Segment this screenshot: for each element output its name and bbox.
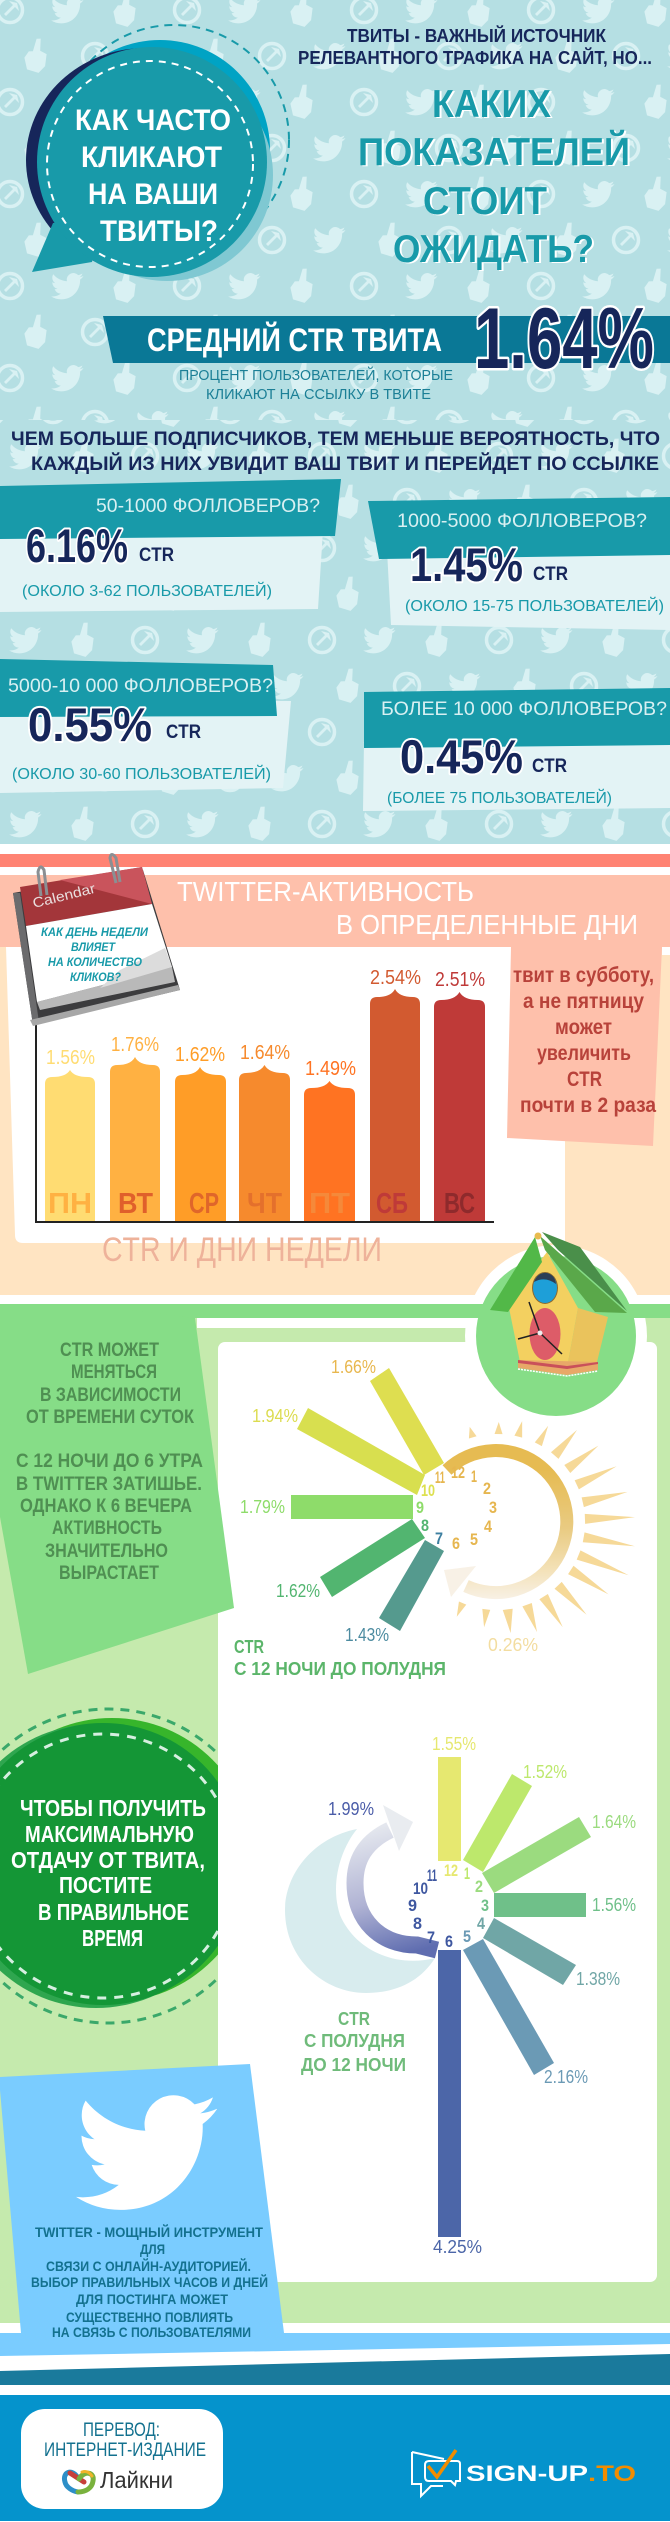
heading: twitter activity on certain days [177,876,638,940]
bar: Sunday: 2.51% [435,969,485,991]
panel: 5000-10000 followers [0,659,291,793]
labels: values: 1.55% [432,1734,476,1754]
labels: clock numerals: 7 [435,1529,443,1548]
icon: calendar: ВЛИЯЕТ [71,940,116,954]
bar: Thursday: 1.64% [240,1042,290,1064]
bar: Thursday [239,1042,290,1221]
icon: calendar: КЛИКОВ? [70,970,122,984]
panel: over 10000 followers: 0.45% [400,730,523,783]
intro text: РЕЛЕВАНТНОГО ТРАФИКА НА САЙТ, НО... [298,47,652,68]
bar: Tuesday: 1.76% [111,1034,159,1056]
chart: CTR from midnight to noon (sun clock) [240,1357,636,1655]
bar: Wednesday: СР [189,1188,219,1220]
arrow: moon ring [355,1805,437,1950]
panel: 50-1000 followers: 50-1000 ФОЛЛОВЕРОВ? [96,496,320,517]
bar: Sunday [434,969,485,1221]
panel: time of day note: АКТИВНОСТЬ [52,1518,162,1539]
panel: 50-1000 followers: 6.16% [26,519,128,572]
bars: hours [438,1757,591,2237]
bar: Friday: ПТ [309,1188,350,1220]
panel: over 10000 followers: (БОЛЕЕ 75 ПОЛЬЗОВАТЕЛЕЙ) [387,788,612,807]
labels: clock numerals: 6 [445,1932,453,1951]
labels: clock numerals: 11 [427,1866,437,1885]
labels: clock numerals: 2 [475,1877,483,1896]
labels: clock numerals: 2 [483,1479,491,1498]
arrow: sun ring [444,1451,567,1597]
subheading: more followers: ЧЕМ БОЛЬШЕ ПОДПИСЧИКОВ, ТЕМ МЕНЬШЕ ВЕРОЯТНОСТЬ, ЧТО [11,429,660,450]
labels: values: 1.64% [592,1812,636,1832]
note: saturday tweet: CTR [567,1068,602,1091]
panel: time of day note: ВЫРАСТАЕТ [59,1563,159,1584]
labels: clock numerals: 12 [451,1463,465,1482]
labels: values [240,1357,538,1655]
banner: average tweet CTR [103,291,670,387]
icon: calendar: Calendar [31,880,97,911]
panel: twitter conclusion [0,2064,284,2340]
labels: clock numerals: 3 [481,1896,489,1915]
panel: time of day note: МЕНЯТЬСЯ [71,1362,157,1383]
heading: twitter activity on certain days: В ОПРЕДЕЛЕННЫЕ ДНИ [336,909,638,940]
card: translation credit: ПЕРЕВОД: [83,2420,160,2441]
bar: Saturday: 2.54% [370,967,421,989]
heading: which metrics to expect: СТОИТ [423,180,547,223]
bar: Saturday: СБ [376,1188,408,1220]
labels: values: 2.16% [544,2067,588,2087]
panel: time of day note [0,1304,234,1674]
labels: values: 1.62% [276,1581,320,1601]
subheading: more followers [11,429,660,475]
chart caption: noon to midnight [301,2009,406,2075]
note: saturday tweet: а не пятницу [523,990,644,1013]
heading: which metrics to expect [358,83,632,272]
heading: twitter activity on certain days: TWITTER-АКТИВНОСТЬ [177,876,474,907]
panel: 5000-10000 followers: 5000-10 000 ФОЛЛОВЕРОВ? [8,676,273,697]
bar: Tuesday: ВТ [118,1188,153,1220]
bar: Sunday: ВС [444,1188,475,1220]
labels: clock numerals [416,1463,497,1553]
text: conclusion: ВЫБОР ПРАВИЛЬНЫХ ЧАСОВ И ДНЕЙ [31,2273,268,2290]
panel: patterned top background [0,0,670,844]
bar: Tuesday [110,1034,160,1221]
labels: clock numerals: 6 [452,1534,460,1553]
chart caption: midnight to noon [234,1637,446,1679]
icon: cuckoo birdhouse [0,1232,670,1427]
note: saturday tweet: твит в субботу, [513,964,654,987]
panel: over 10000 followers [363,688,670,811]
bars: hours [291,1368,444,1631]
labels: values: 1.99% [328,1799,374,1819]
intro text [298,25,652,68]
chart title: CTR and weekdays: CTR И ДНИ НЕДЕЛИ [102,1231,382,1269]
labels: clock numerals: 4 [484,1517,492,1536]
bar: Wednesday: 1.62% [175,1044,225,1066]
bar: Friday: 1.49% [305,1058,356,1080]
panel: 50-1000 followers: CTR [139,545,174,566]
chart caption: noon to midnight: С ПОЛУДНЯ [304,2031,405,2051]
panel: 1000-5000 followers: 1000-5000 ФОЛЛОВЕРОВ? [397,511,647,532]
icon: heart logo [64,2472,93,2492]
panel: 1000-5000 followers: CTR [533,564,568,585]
chart caption: midnight to noon: CTR [234,1637,264,1657]
panel: 1000-5000 followers: (ОКОЛО 15-75 ПОЛЬЗОВАТЕЛЕЙ) [405,596,664,615]
icon: calendar: НА КОЛИЧЕСТВО [48,955,143,969]
labels: clock numerals: 9 [408,1896,417,1915]
labels: clock numerals: 12 [444,1861,458,1880]
labels: clock numerals [408,1861,489,1951]
panel: time of day note: CTR МОЖЕТ [60,1340,159,1361]
labels: clock numerals: 3 [489,1498,497,1517]
panel: footer [0,2395,670,2521]
text: conclusion: TWITTER - МОЩНЫЙ ИНСТРУМЕНТ [35,2223,263,2240]
panel: 5000-10000 followers: CTR [166,722,201,743]
labels: clock numerals: 11 [435,1468,445,1487]
labels: values: 0.26% [488,1635,538,1655]
text: conclusion: СУЩЕСТВЕННО ПОВЛИЯТЬ [66,2309,233,2325]
callout: post at the right time (green circle): ЧТОБЫ ПОЛУЧИТЬ [20,1795,206,1821]
bar: Monday [45,1047,95,1221]
callout: post at the right time (green circle) [0,1708,218,2024]
panel: time of day note: ОТ ВРЕМЕНИ СУТОК [26,1407,194,1428]
labels: values: 1.66% [331,1357,376,1377]
note: saturday tweet: почти в 2 раза [520,1094,656,1117]
text: conclusion [31,2223,268,2340]
panel: time of day note: В TWITTER ЗАТИШЬЕ. [16,1474,202,1495]
bar: Monday: ПН [48,1188,92,1220]
panel: time of day note: ОДНАКО К 6 ВЕЧЕРА [20,1496,192,1517]
logo: sign-up.to [412,2450,636,2496]
bottom bands [0,2323,670,2385]
card: translation credit: Лайкни [100,2467,173,2493]
bar chart: CTR by weekday [36,967,494,1222]
chart caption: midnight to noon: С 12 НОЧИ ДО ПОЛУДНЯ [234,1659,446,1679]
text: conclusion: СВЯЗИ С ОНЛАЙН-АУДИТОРИЕЙ. [46,2257,251,2274]
subheading: more followers: КАЖДЫЙ ИЗ НИХ УВИДИТ ВАШ ТВИТ И ПЕРЕЙДЕТ ПО ССЫЛКЕ [31,453,659,475]
icon: crescent moon [285,1829,435,1993]
panel: 5000-10000 followers: 0.55% [28,698,152,751]
bar: Monday: 1.56% [46,1047,95,1069]
panel: time of day note: ЗНАЧИТЕЛЬНО [45,1541,168,1562]
labels: values [328,1734,636,2257]
labels: clock numerals: 5 [463,1927,471,1946]
speech bubble: how often do they click: ТВИТЫ? [100,215,218,248]
panel: time of day note: С 12 НОЧИ ДО 6 УТРА [16,1451,203,1472]
text: conclusion: ДЛЯ ПОСТИНГА МОЖЕТ [76,2291,228,2307]
callout: post at the right time (green circle): ВРЕМЯ [82,1925,143,1951]
heading: which metrics to expect: ПОКАЗАТЕЛЕЙ [360,130,632,175]
heading: which metrics to expect: ОЖИДАТЬ? [395,229,596,272]
card: translation credit [21,2409,223,2509]
panel: weekday section background [0,854,670,1295]
labels: clock numerals: 4 [477,1914,485,1933]
bar: Thursday: ЧТ [247,1188,282,1220]
speech bubble: how often do they click: КАК ЧАСТО [75,104,231,137]
icon: calendar [13,854,180,1026]
panel: time of day section background [0,1318,670,2323]
heading: which metrics to expect: КАКИХ [434,84,553,127]
logo: sign-up.to: .TO [588,2461,636,2486]
panel: 1000-5000 followers [368,497,670,630]
panel: over 10000 followers: CTR [532,756,567,777]
heading: which metrics to expect: ПОКАЗАТЕЛЕЙ [358,129,630,174]
callout: post at the right time (green circle): МАКСИМАЛЬНУЮ [25,1821,194,1847]
labels: values: 1.56% [592,1895,636,1915]
note: saturday tweet [507,947,662,1146]
bar: Wednesday [175,1044,226,1221]
labels: clock numerals: 10 [413,1879,428,1898]
text: conclusion: НА СВЯЗЬ С ПОЛЬЗОВАТЕЛЯМИ [52,2324,251,2340]
callout: post at the right time (green circle): ОТДАЧУ ОТ ТВИТА, [11,1847,205,1873]
caption: percentage of users: ПРОЦЕНТ ПОЛЬЗОВАТЕЛЕЙ, КОТОРЫЕ [179,366,453,384]
heading: which metrics to expect: ОЖИДАТЬ? [393,228,594,271]
panel: 50-1000 followers: (ОКОЛО 3-62 ПОЛЬЗОВАТЕЛЕЙ) [22,581,272,600]
labels: values: 1.52% [523,1762,567,1782]
note: saturday tweet: увеличить [537,1042,631,1065]
labels: clock numerals: 10 [421,1481,435,1500]
bar: Friday [304,1058,356,1221]
labels: values: 1.94% [252,1406,298,1426]
labels: clock numerals: 7 [427,1928,435,1947]
heading: which metrics to expect: СТОИТ [425,181,549,224]
labels: clock numerals: 8 [421,1516,429,1535]
banner: average tweet CTR: СРЕДНИЙ CTR ТВИТА [147,322,442,358]
labels: values: 1.38% [576,1969,620,1989]
panel: 1000-5000 followers: 1.45% [410,538,523,591]
labels: clock numerals: 5 [470,1530,478,1549]
labels: values: 4.25% [433,2237,482,2257]
icon: twitter bird [76,2095,217,2210]
labels: values: 1.43% [345,1625,389,1645]
callout: post at the right time (green circle): ПОСТИТЕ [59,1872,152,1898]
panel: time of day note: В ЗАВИСИМОСТИ [40,1385,181,1406]
labels: clock numerals: 1 [471,1467,477,1486]
panel: over 10000 followers: БОЛЕЕ 10 000 ФОЛЛОВЕРОВ? [381,699,667,720]
chart caption: noon to midnight: ДО 12 НОЧИ [301,2055,406,2075]
bar: Saturday [370,967,421,1221]
icon: sun rays [453,1420,636,1634]
speech bubble: how often do they click [26,25,289,281]
labels: clock numerals: 8 [413,1914,422,1933]
labels: clock numerals: 1 [464,1864,470,1883]
caption: percentage of users [179,366,453,403]
labels: clock numerals: 9 [416,1498,424,1517]
chart: CTR from noon to midnight (moon clock) [285,1734,636,2257]
speech bubble: how often do they click: КЛИКАЮТ [81,141,222,174]
text: conclusion: ДЛЯ [140,2241,165,2257]
note: saturday tweet: может [555,1016,612,1039]
icon: calendar: КАК ДЕНЬ НЕДЕЛИ [41,925,148,939]
chart caption: noon to midnight: CTR [338,2009,370,2029]
panel: 50-1000 followers [0,479,341,612]
labels: values: 1.79% [240,1497,285,1517]
speech bubble: how often do they click: НА ВАШИ [88,178,218,211]
card: translation credit: ИНТЕРНЕТ-ИЗДАНИЕ [44,2440,206,2461]
intro text: ТВИТЫ - ВАЖНЫЙ ИСТОЧНИК [347,25,607,46]
panel: 5000-10000 followers: (ОКОЛО 30-60 ПОЛЬЗОВАТЕЛЕЙ) [12,764,271,783]
callout: post at the right time (green circle): В ПРАВИЛЬНОЕ [38,1899,189,1925]
heading: which metrics to expect: КАКИХ [432,83,551,126]
logo: sign-up.to: SIGN-UP [466,2461,588,2486]
caption: percentage of users: КЛИКАЮТ НА ССЫЛКУ В ТВИТЕ [206,386,431,403]
